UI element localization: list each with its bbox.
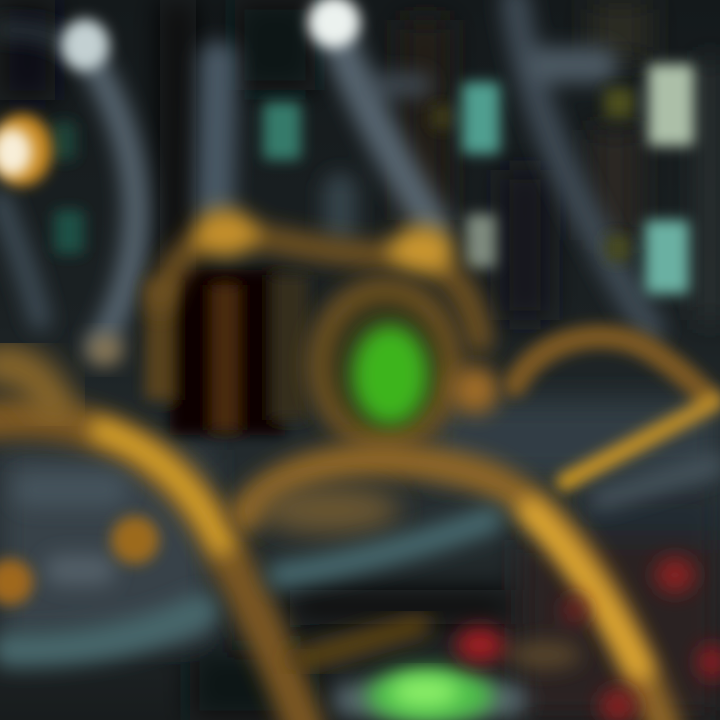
red components [456, 557, 720, 720]
gold large middle arc [245, 460, 665, 720]
gold upper frame [160, 209, 480, 340]
orange components [0, 516, 159, 605]
teal indicator panels [52, 64, 694, 294]
teal circuit strips [10, 465, 715, 700]
glowing amber light [0, 114, 52, 186]
gold large left arc [0, 335, 305, 720]
white lights [61, 0, 360, 71]
grey cables [0, 0, 650, 345]
dark central block [145, 270, 308, 435]
gold ring with green core [317, 287, 499, 443]
bright green glow [366, 668, 494, 720]
gold right arc and strut [515, 337, 715, 482]
